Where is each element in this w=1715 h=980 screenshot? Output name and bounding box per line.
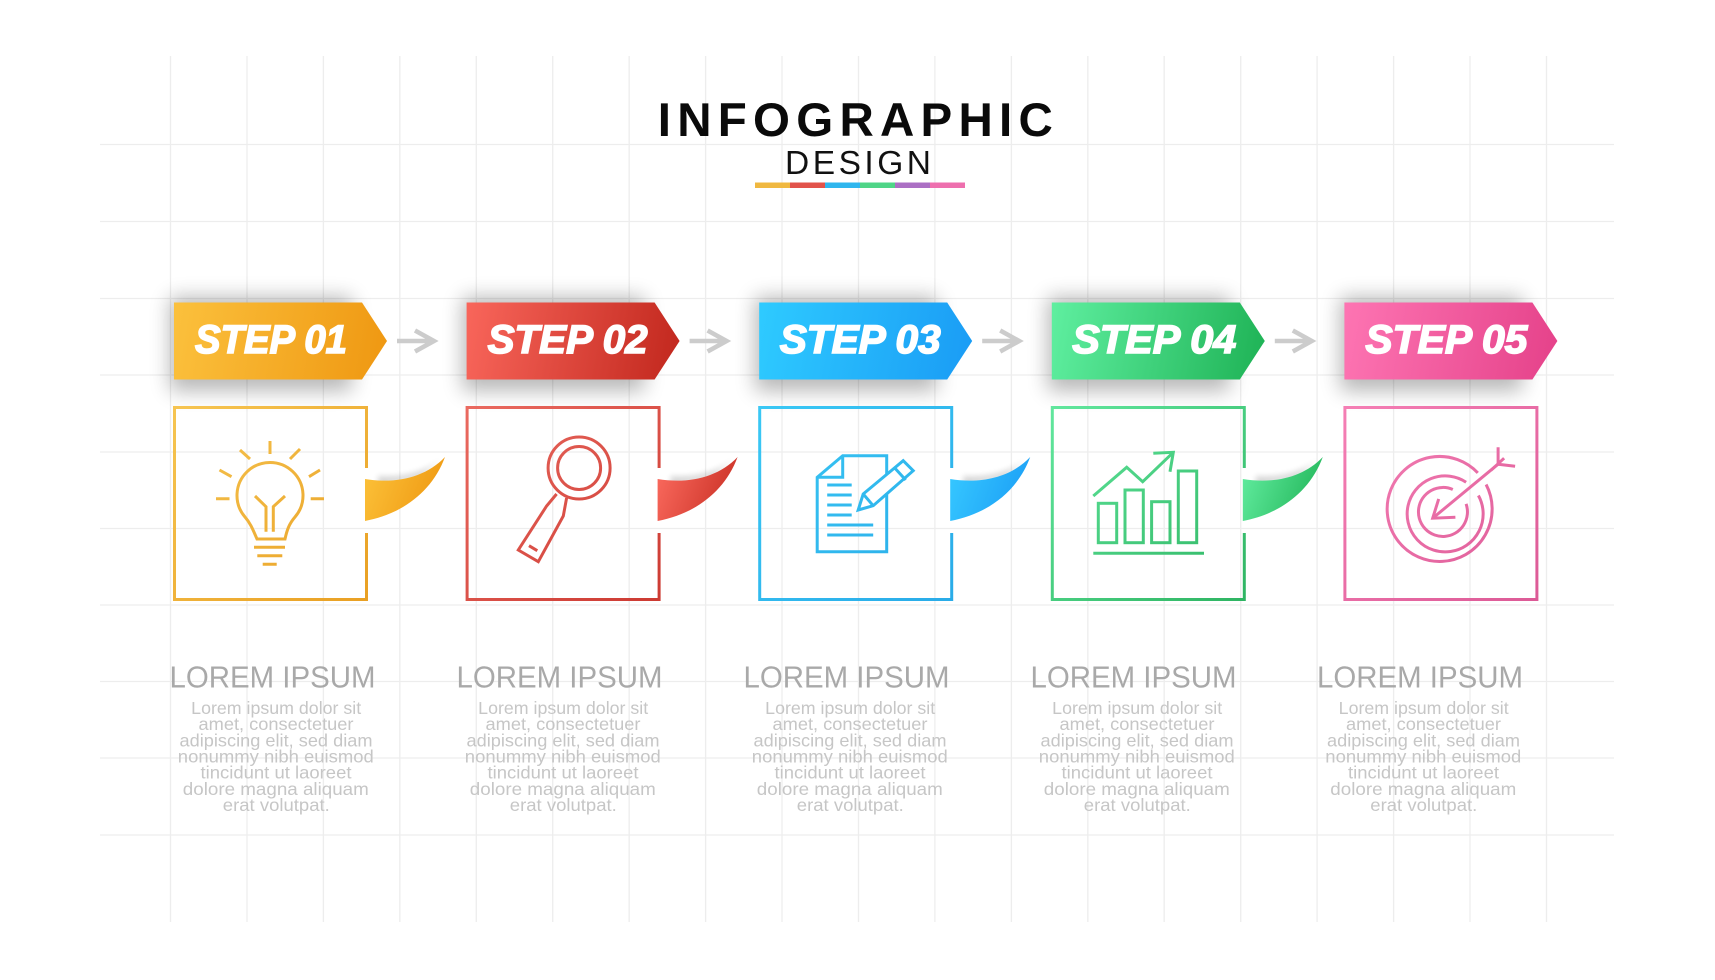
banner: step 01 [170, 297, 387, 391]
body copy: adipiscing elit, sed diam [466, 730, 660, 750]
ribbon tab [1243, 457, 1323, 521]
panel: step 2 [463, 297, 738, 600]
icon box [1345, 408, 1537, 600]
body copy: dolore magna aliquam [183, 779, 369, 799]
banner: step 03: STEP 03 [780, 318, 941, 362]
body copy: erat volutpat. [1084, 795, 1191, 815]
icon: document and pencil [817, 456, 913, 552]
icon: target with arrow [1387, 447, 1515, 561]
body copy [178, 698, 374, 815]
panel: step 1 [170, 297, 445, 600]
title block [658, 94, 1053, 188]
panel: step 4 [1048, 297, 1323, 600]
banner: step 05 [1340, 297, 1557, 391]
body copy: erat volutpat. [510, 795, 617, 815]
body copy: amet, consectetuer [772, 714, 928, 734]
ribbon tab [950, 457, 1030, 521]
body copy [752, 698, 948, 815]
body copy: tincidunt ut laoreet [1062, 762, 1213, 782]
icon box [467, 408, 659, 600]
heading: LOREM IPSUM [1030, 660, 1236, 695]
rainbow underline [755, 182, 965, 188]
body copy: amet, consectetuer [1346, 714, 1501, 734]
body copy: erat volutpat. [1370, 795, 1477, 815]
text block: column 2 [456, 660, 662, 815]
body copy: nonummy nibh euismod [1325, 746, 1521, 766]
body copy: erat volutpat. [223, 795, 330, 815]
body copy: tincidunt ut laoreet [200, 762, 352, 782]
banner: step 04 [1048, 297, 1265, 391]
body copy: Lorem ipsum dolor sit [1339, 698, 1509, 718]
icon box [760, 408, 952, 600]
panel: step 5 [1340, 297, 1557, 600]
body copy: Lorem ipsum dolor sit [1052, 698, 1222, 718]
body copy: nonummy nibh euismod [752, 746, 948, 766]
icon: magnifying glass [518, 437, 610, 562]
icon: growth chart [1093, 452, 1204, 553]
heading: LOREM IPSUM [456, 660, 662, 695]
body copy [1039, 698, 1235, 815]
body copy: Lorem ipsum dolor sit [478, 698, 648, 718]
icon box [174, 408, 366, 600]
body copy: nonummy nibh euismod [465, 746, 661, 766]
text block: column 4 [1030, 660, 1236, 815]
heading: LOREM IPSUM [744, 660, 950, 695]
banner: step 02 [463, 297, 680, 391]
ribbon tab [658, 457, 738, 521]
arrow: step 3 to 4 [982, 330, 1019, 352]
text block: column 1 [170, 660, 376, 815]
banner: step 03 [755, 297, 972, 391]
body copy: amet, consectetuer [486, 714, 641, 734]
body copy: Lorem ipsum dolor sit [191, 698, 361, 718]
arrow: step 4 to 5 [1275, 330, 1312, 352]
body copy: nonummy nibh euismod [178, 746, 374, 766]
arrow: step 2 to 3 [690, 330, 727, 352]
body copy [465, 698, 661, 815]
body copy: amet, consectetuer [198, 714, 354, 734]
body copy: Lorem ipsum dolor sit [765, 698, 935, 718]
text block: column 3 [744, 660, 950, 815]
banner: step 04: STEP 04 [1072, 318, 1236, 362]
body copy: adipiscing elit, sed diam [754, 730, 946, 750]
text block: column 5 [1317, 660, 1523, 815]
body copy: amet, consectetuer [1060, 714, 1215, 734]
heading: LOREM IPSUM [170, 660, 376, 695]
icon: light bulb [216, 441, 324, 564]
body copy: dolore magna aliquam [1330, 779, 1516, 799]
body copy: dolore magna aliquam [470, 779, 656, 799]
ribbon tab [365, 457, 445, 521]
body copy: adipiscing elit, sed diam [1327, 730, 1520, 750]
subtitle: DESIGN: DESIGN [785, 145, 931, 182]
panel: step 3 [755, 297, 1030, 600]
body copy: tincidunt ut laoreet [488, 762, 639, 782]
body copy: tincidunt ut laoreet [1348, 762, 1499, 782]
body copy: dolore magna aliquam [757, 779, 943, 799]
banner: step 01: STEP 01 [195, 318, 347, 362]
body copy: adipiscing elit, sed diam [180, 730, 372, 750]
body copy: dolore magna aliquam [1044, 779, 1230, 799]
body copy: tincidunt ut laoreet [774, 762, 926, 782]
icon box [1052, 408, 1244, 600]
banner: step 02: STEP 02 [488, 318, 648, 362]
title: INFOGRAPHIC: INFOGRAPHIC [658, 94, 1053, 147]
arrow: step 1 to 2 [397, 330, 434, 352]
body copy: adipiscing elit, sed diam [1040, 730, 1234, 750]
body copy: nonummy nibh euismod [1039, 746, 1235, 766]
body copy: erat volutpat. [797, 795, 904, 815]
heading: LOREM IPSUM [1317, 660, 1523, 695]
body copy [1325, 698, 1521, 815]
banner: step 05: STEP 05 [1365, 318, 1528, 362]
